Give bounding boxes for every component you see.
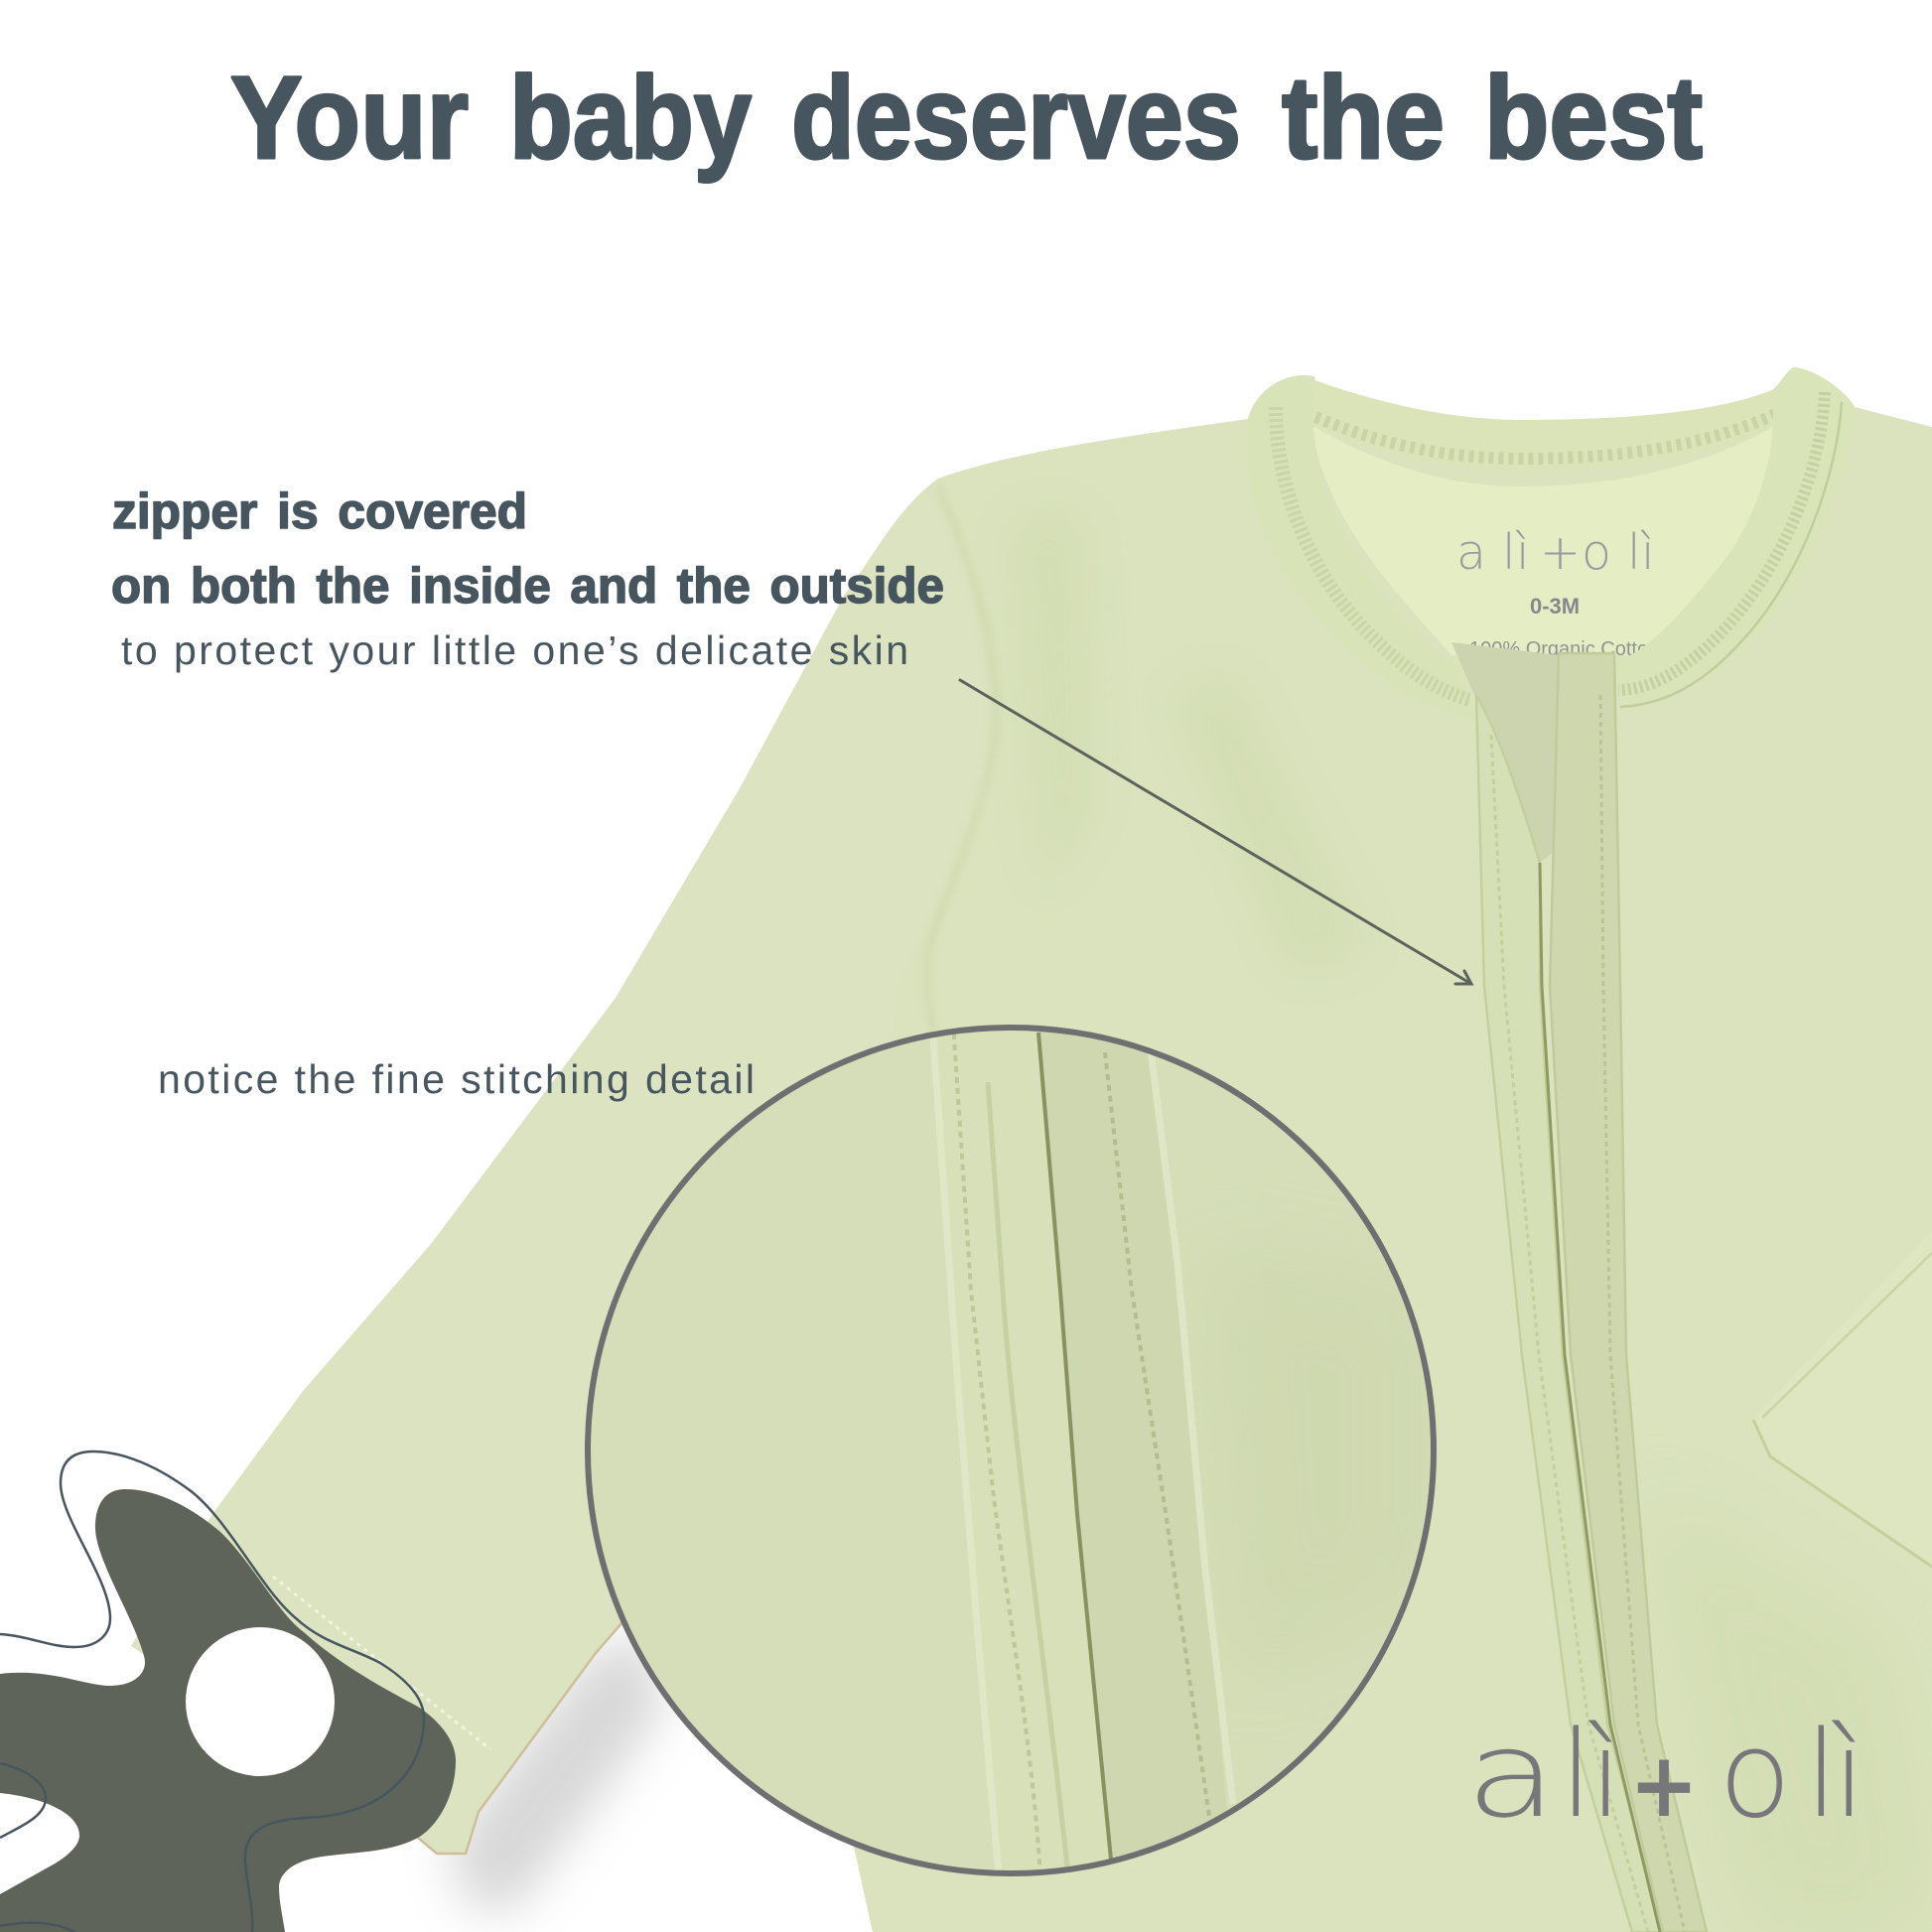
decorative outline corner arc bbox=[0, 1923, 74, 1932]
right placket in detail bbox=[1038, 1023, 1233, 1876]
sleeve shadow bbox=[447, 1628, 665, 1911]
left collar stitching bbox=[1276, 407, 1469, 700]
title bbox=[230, 53, 1703, 184]
sleeve cuff stitching bbox=[273, 1577, 490, 1749]
back neck stitching bbox=[1315, 409, 1787, 459]
callout body text: to protect your little one’s delicate skin bbox=[121, 627, 908, 673]
title: the bbox=[1282, 53, 1445, 184]
inside neck with label bbox=[1310, 380, 1789, 660]
middle ridge bbox=[988, 1082, 1067, 1866]
white circle in blob bbox=[186, 1627, 335, 1776]
back neck band bbox=[1310, 380, 1789, 470]
logo: ali+oli: olì bbox=[1719, 1707, 1865, 1845]
decorative outline curve lower left bbox=[0, 1763, 46, 1838]
left placket strip bbox=[1476, 695, 1663, 1932]
logo: ali+oli: lì bbox=[1560, 1707, 1622, 1845]
body panel bbox=[854, 367, 1932, 1932]
left placket stitching bbox=[1491, 735, 1648, 1932]
label size: 0-3M bbox=[1530, 594, 1580, 619]
shoulder seam shading bbox=[927, 486, 996, 1033]
right placket stitching bbox=[1600, 695, 1685, 1932]
stitching note: notice the fine stitching detail bbox=[158, 1056, 755, 1102]
left front collar band bbox=[1246, 375, 1474, 720]
left sleeve bbox=[131, 479, 1092, 1854]
zipper flap bbox=[1451, 642, 1564, 863]
right placket strip bbox=[1550, 653, 1707, 1932]
callout heading: zipper is covered: zipper is covered bbox=[112, 483, 527, 539]
right sleeve bbox=[1753, 1231, 1932, 1567]
right placket seam bbox=[1150, 1042, 1233, 1804]
callout arrow bbox=[960, 680, 1471, 984]
magnifier: stitching detail bbox=[588, 1023, 1436, 1876]
fabric folds bbox=[1763, 1662, 1841, 1855]
right placket stitching bbox=[1105, 1052, 1209, 1817]
cuff hem bbox=[418, 1622, 622, 1854]
title: deserves bbox=[791, 53, 1241, 184]
logo: ali+oli: + bbox=[1629, 1733, 1699, 1838]
title: best bbox=[1484, 53, 1703, 184]
left placket seam bbox=[932, 1023, 999, 1876]
right collar edge bbox=[1620, 402, 1842, 707]
magnifier ring bbox=[588, 1028, 1434, 1873]
title: Your bbox=[230, 53, 469, 184]
logo: ali+oli bbox=[1465, 1706, 1865, 1845]
decorative outline curve bbox=[0, 1451, 424, 1932]
callout heading: on both the inside and the outside: on both the inside and the outside bbox=[111, 558, 944, 614]
zipper slit bbox=[1540, 863, 1660, 1932]
left placket in detail bbox=[932, 1023, 1111, 1876]
zipper slit in detail bbox=[1038, 1033, 1111, 1860]
left placket stitching bbox=[953, 1023, 1040, 1876]
label fabric text, cut off by the flap: 100% Organic Cotton bbox=[1469, 638, 1659, 660]
right collar ribbing bbox=[1618, 392, 1825, 690]
right front collar band bbox=[1611, 367, 1855, 707]
fabric tone patches bbox=[1201, 1241, 1436, 1688]
title: baby bbox=[509, 53, 752, 184]
logo: ali+oli: a bbox=[1465, 1706, 1558, 1845]
label logo: alì+olì bbox=[1456, 524, 1655, 581]
garment: baby sleepsuit bbox=[131, 367, 1932, 1932]
decorative blob with hole bbox=[0, 1489, 456, 1932]
